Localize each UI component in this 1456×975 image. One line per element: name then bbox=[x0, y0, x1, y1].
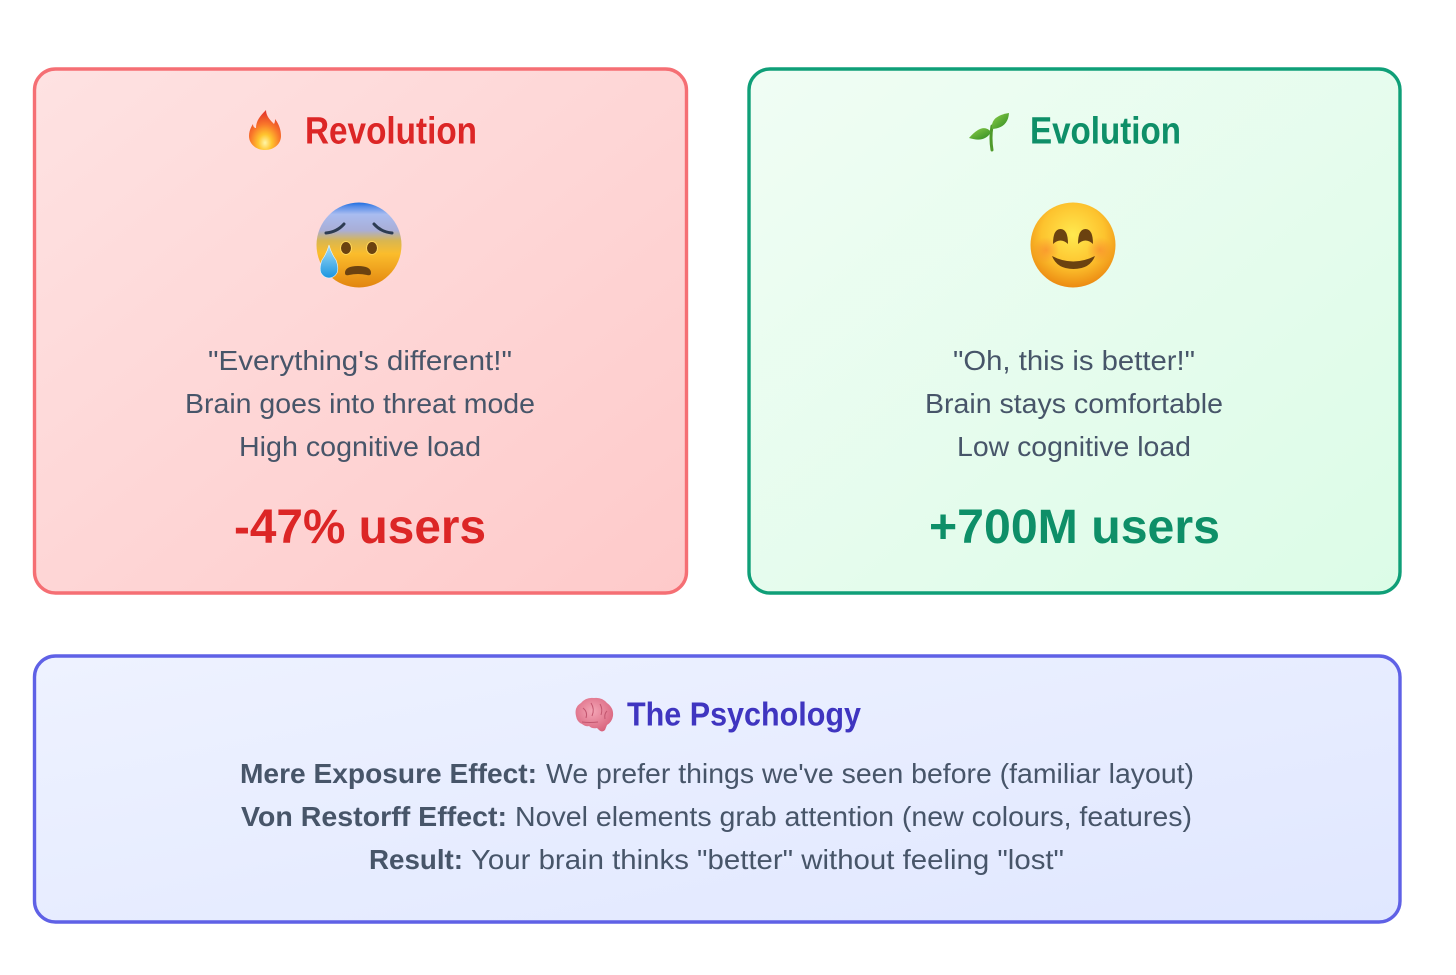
panel: the psychology bbox=[34, 656, 1400, 922]
text block: evolution description: Brain stays comfortable bbox=[925, 388, 1223, 419]
text block: psychology effects: Novel elements grab attention (new colours, features) bbox=[515, 801, 1192, 832]
icon: anxious face with sweat bbox=[316, 202, 402, 288]
text block: psychology effects: Mere Exposure Effect: bbox=[240, 758, 537, 789]
text block: revolution description bbox=[185, 345, 535, 462]
text block: revolution description: "Everything's different!" bbox=[208, 345, 512, 376]
text block: evolution description: Low cognitive load bbox=[957, 431, 1191, 462]
heading: evolution: Evolution bbox=[1030, 110, 1181, 152]
text block: psychology effects bbox=[240, 758, 1194, 875]
stat: revolution users: -47% users bbox=[234, 501, 486, 554]
icon: seedling bbox=[969, 113, 1009, 150]
panel: evolution bbox=[749, 69, 1400, 593]
text block: psychology effects: We prefer things we've seen before (familiar layout) bbox=[546, 758, 1194, 789]
text block: psychology effects: Your brain thinks "better" without feeling "lost" bbox=[471, 844, 1064, 875]
icon: fire bbox=[249, 110, 281, 150]
icon: smiling face bbox=[1030, 202, 1116, 288]
text block: psychology effects: Von Restorff Effect: bbox=[241, 801, 507, 832]
heading: the psychology: The Psychology bbox=[627, 696, 862, 732]
text block: evolution description: "Oh, this is better!" bbox=[953, 345, 1195, 376]
stat: evolution users: +700M users bbox=[929, 501, 1220, 554]
text block: psychology effects: Result: bbox=[369, 844, 463, 875]
icon: brain bbox=[576, 698, 613, 732]
heading: revolution: Revolution bbox=[305, 110, 477, 152]
text block: revolution description: Brain goes into threat mode bbox=[185, 388, 535, 419]
panel: revolution bbox=[34, 69, 686, 593]
text block: revolution description: High cognitive load bbox=[239, 431, 481, 462]
text block: evolution description bbox=[925, 345, 1223, 462]
